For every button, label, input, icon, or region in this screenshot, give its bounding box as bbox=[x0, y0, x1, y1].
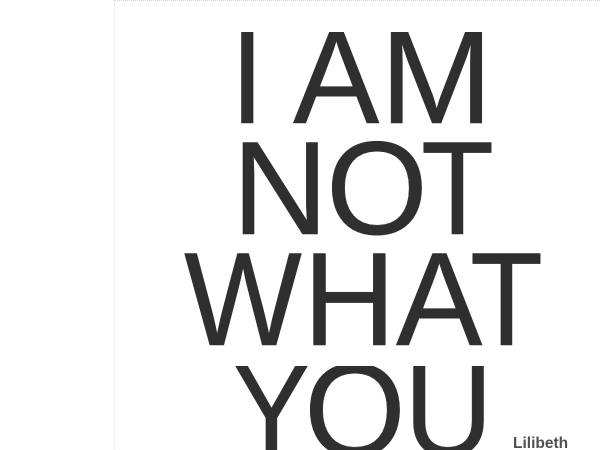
headline line: WHAT: H bbox=[303, 226, 396, 374]
headline line: NOT bbox=[232, 115, 494, 263]
headline line: NOT: O bbox=[326, 115, 428, 263]
headline bbox=[184, 32, 542, 450]
headline line: YOU bbox=[232, 366, 493, 450]
headline line: NOT: T bbox=[421, 115, 494, 263]
headline line: WHAT bbox=[184, 226, 542, 374]
headline line: WHAT: W bbox=[184, 226, 301, 374]
headline line: NOT: N bbox=[232, 115, 328, 263]
headline line: WHAT: A bbox=[396, 226, 482, 374]
headline line: WHAT: T bbox=[470, 226, 542, 374]
headline line: I AM bbox=[230, 32, 492, 152]
